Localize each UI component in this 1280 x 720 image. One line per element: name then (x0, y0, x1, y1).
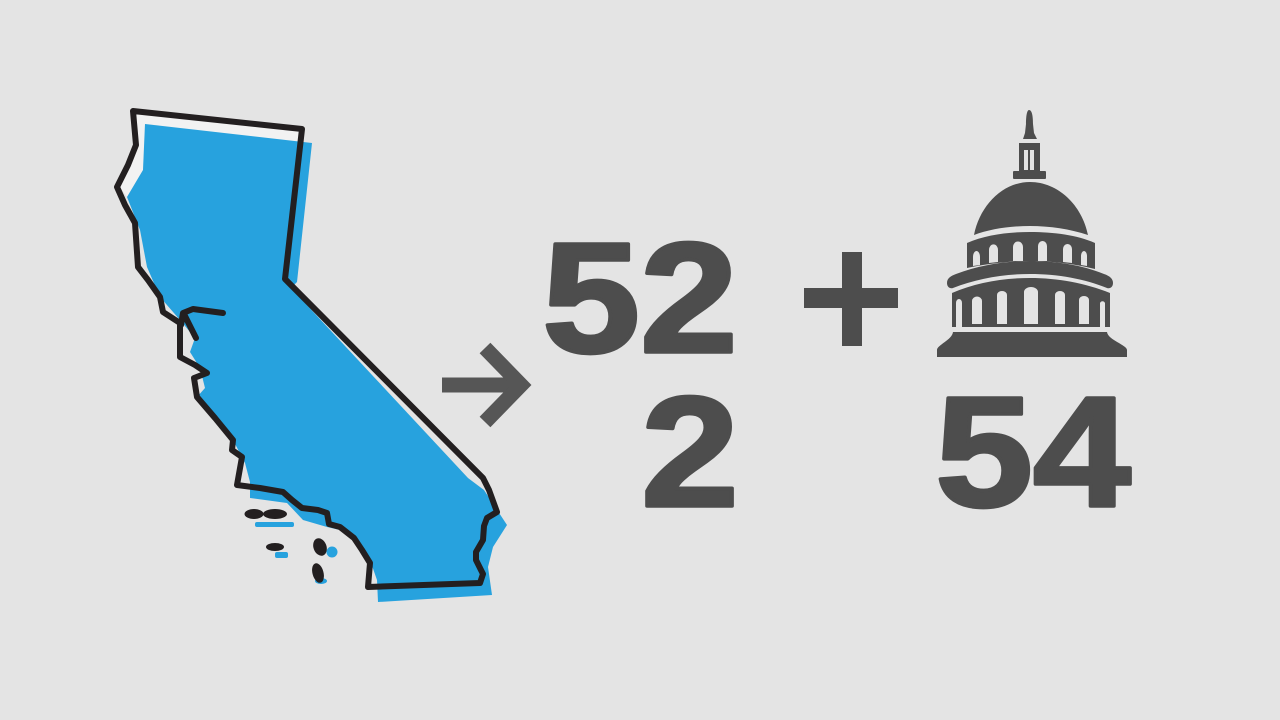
icon: California map (117, 111, 507, 602)
icon: capitol dome (937, 110, 1127, 357)
lantern (1019, 143, 1040, 171)
map blue fill (127, 124, 507, 602)
lower colonnade (952, 278, 1110, 327)
bay inlet line (181, 309, 223, 338)
arrow (442, 348, 521, 422)
number: 54: 54 (935, 365, 1131, 540)
base (937, 332, 1127, 357)
channel islands (244, 509, 329, 584)
spire (1023, 110, 1037, 139)
dome (974, 182, 1088, 235)
plus sign (804, 252, 898, 346)
map highlight halo (120, 111, 330, 330)
island shadows (255, 522, 338, 584)
number: 52: 52 (542, 211, 738, 386)
upper drum with windows (967, 232, 1095, 269)
middle cornice (947, 261, 1113, 288)
map outline (117, 111, 497, 587)
number: 2: 2 (641, 365, 739, 540)
lantern base (1013, 171, 1046, 179)
